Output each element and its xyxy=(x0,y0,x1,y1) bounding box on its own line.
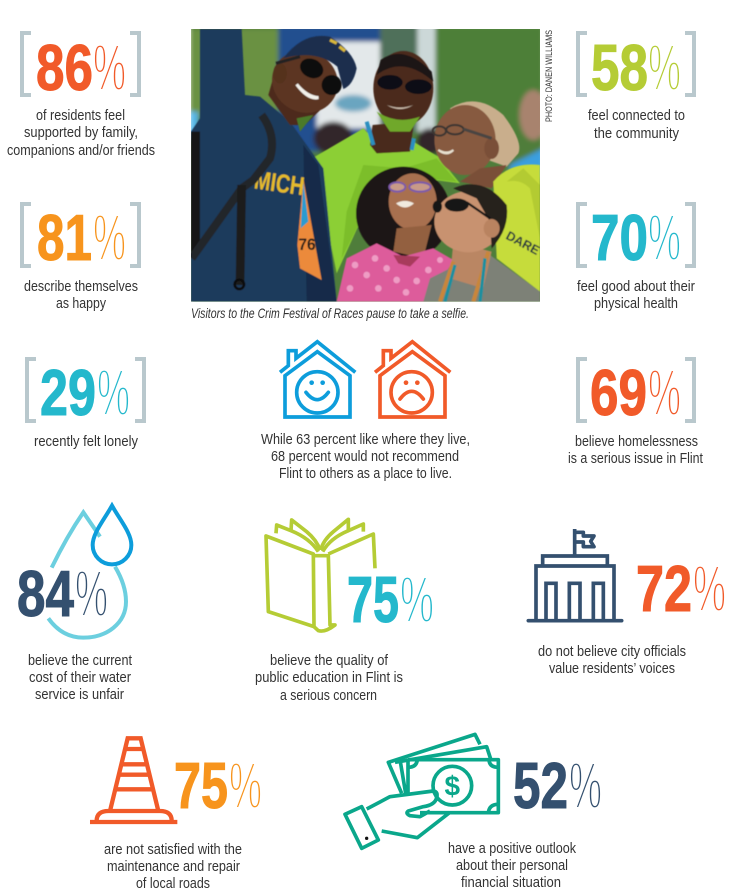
stat: 29 percent lonely xyxy=(27,355,144,450)
description: do not believe city officials xyxy=(538,644,686,660)
description: companions and/or friends xyxy=(7,143,155,159)
percent sign: % xyxy=(97,355,130,429)
stat: 75 percent roads xyxy=(90,738,262,892)
description: public education in Flint is xyxy=(255,670,403,686)
description xyxy=(577,279,695,312)
percent sign: % xyxy=(569,748,602,822)
woman with glasses xyxy=(450,101,519,167)
description: believe homelessness xyxy=(575,434,698,450)
number 52: 52 xyxy=(513,749,568,822)
orange race bib xyxy=(297,178,322,280)
description: recently felt lonely xyxy=(34,434,139,450)
percent sign: % xyxy=(93,30,126,104)
dollar sign: $ xyxy=(445,771,461,802)
brackets xyxy=(22,33,139,95)
number 72: 72 xyxy=(636,552,692,625)
description: cost of their water xyxy=(29,670,131,686)
stat: 52 percent financial outlook xyxy=(345,734,602,891)
icon: open book xyxy=(266,519,375,631)
bib number: 76 xyxy=(298,235,316,254)
percent sign: % xyxy=(75,556,108,630)
description: of local roads xyxy=(136,876,210,892)
number 70: 70 xyxy=(591,201,648,274)
description: believe the current xyxy=(28,653,132,669)
percent sign: % xyxy=(93,200,126,274)
description: value residents’ voices xyxy=(549,661,675,677)
number 58: 58 xyxy=(591,31,648,104)
description xyxy=(448,841,577,891)
description xyxy=(7,108,155,159)
stat: 69 percent homelessness xyxy=(568,355,703,467)
stat: 86 percent supported xyxy=(7,30,155,159)
description: describe themselves xyxy=(24,279,138,295)
description: financial situation xyxy=(461,875,561,891)
description xyxy=(255,653,403,704)
icon: sad house xyxy=(375,342,450,417)
photo credit: PHOTO: DANEN WILLIAMS xyxy=(544,30,555,122)
brackets xyxy=(22,204,139,266)
description: of residents feel xyxy=(36,108,125,124)
photo: family selfie xyxy=(190,25,547,305)
stat: 72 percent city officials xyxy=(528,529,726,677)
number 29: 29 xyxy=(40,356,96,429)
stat: 70 percent physical health xyxy=(577,200,695,312)
brackets xyxy=(578,33,694,95)
man in navy hoodie xyxy=(191,29,337,302)
description xyxy=(24,279,138,312)
number 81: 81 xyxy=(37,201,92,274)
photo caption: Visitors to the Crim Festival of Races pause to take a selfie. xyxy=(191,305,469,321)
description: supported by family, xyxy=(24,125,138,141)
brackets xyxy=(27,359,144,421)
description: believe the quality of xyxy=(270,653,389,669)
brackets xyxy=(578,359,694,421)
icon: hand with money xyxy=(345,734,498,848)
percent sign: % xyxy=(648,200,681,274)
stat: 58 percent connected xyxy=(578,30,694,142)
description: the community xyxy=(594,126,680,142)
description xyxy=(538,644,686,677)
yellow hoodie xyxy=(493,165,540,292)
number 86: 86 xyxy=(36,31,93,104)
text: housing sentiment: While 63 percent like where they live, xyxy=(261,432,470,448)
stat: 84 percent water cost xyxy=(17,506,132,703)
number 75: 75 xyxy=(347,563,399,636)
description: as happy xyxy=(56,296,107,312)
number 84: 84 xyxy=(17,557,74,630)
hoodie lettering: DARE xyxy=(504,229,542,258)
brackets xyxy=(578,204,694,266)
number 69: 69 xyxy=(590,356,647,429)
sweatshirt lettering: MICH xyxy=(252,165,306,201)
number 75: 75 xyxy=(174,749,228,822)
description: service is unfair xyxy=(35,687,124,703)
percent sign: % xyxy=(400,562,434,636)
green shirt man xyxy=(315,128,460,273)
description: is a serious issue in Flint xyxy=(568,451,703,467)
description: have a positive outlook xyxy=(448,841,577,857)
backpack strap xyxy=(191,132,200,255)
description xyxy=(104,842,242,892)
description: a serious concern xyxy=(280,688,377,704)
text: housing sentiment: Flint to others as a place to live. xyxy=(279,466,452,482)
description xyxy=(28,653,132,703)
percent sign: % xyxy=(648,30,681,104)
icon: water drops xyxy=(48,506,131,638)
description: feel good about their xyxy=(577,279,695,295)
photo background xyxy=(190,25,547,305)
icon: traffic cone xyxy=(90,738,177,822)
description xyxy=(568,434,703,467)
stat: 75 percent public education xyxy=(255,519,434,704)
percent sign: % xyxy=(648,355,681,429)
description: feel connected to xyxy=(588,108,685,124)
boy xyxy=(423,255,540,302)
icon: happy house xyxy=(280,342,355,417)
icon: city hall xyxy=(528,529,622,621)
text: housing sentiment: 68 percent would not recommend xyxy=(271,449,459,465)
text: housing sentiment xyxy=(261,432,470,482)
description xyxy=(588,108,685,142)
stat: 81 percent happy xyxy=(22,200,139,312)
description: are not satisfied with the xyxy=(104,842,242,858)
percent sign: % xyxy=(229,748,262,822)
description: maintenance and repair xyxy=(107,859,240,875)
girl xyxy=(356,167,451,260)
description: about their personal xyxy=(456,858,568,874)
description: physical health xyxy=(594,296,678,312)
